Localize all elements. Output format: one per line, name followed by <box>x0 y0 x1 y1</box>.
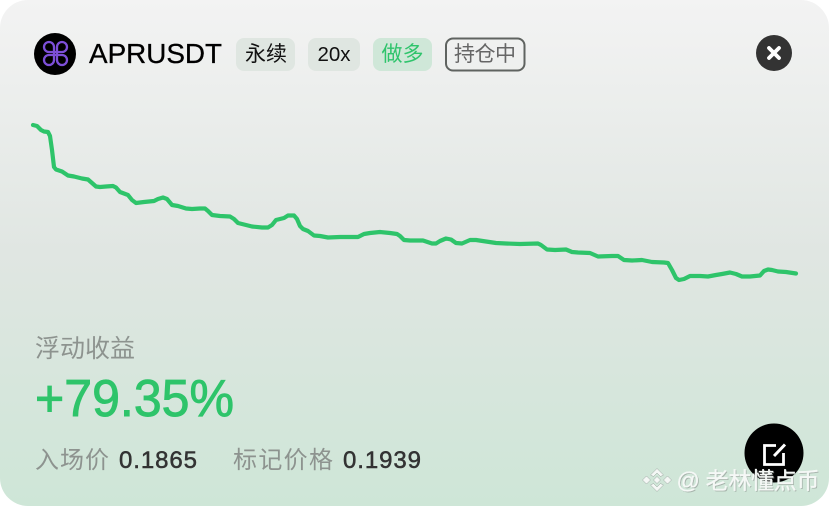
label: floating PnL: 浮动收益 <box>35 335 135 363</box>
badge: leverage: 20x <box>317 43 351 66</box>
icon: edit button <box>744 424 804 482</box>
PnL value: +79.35% <box>35 370 234 428</box>
badge: position open <box>446 38 524 70</box>
mark price <box>233 447 421 474</box>
watermark text: @ 老林懂点币 <box>678 468 820 494</box>
icon: diamond logo <box>642 468 672 492</box>
badge: position open: 持仓中 <box>454 43 516 66</box>
header <box>34 33 792 75</box>
badge: long: 做多 <box>382 43 424 66</box>
symbol name: APRUSDT <box>89 38 222 69</box>
badge: perpetual: 永续 <box>245 43 287 66</box>
icon: close button <box>756 35 792 71</box>
watermark: @ 老林懂点币 <box>676 468 820 494</box>
entry price: 入场价 <box>35 447 109 474</box>
entry price: 0.1865 <box>119 447 197 474</box>
badge: perpetual <box>236 38 295 71</box>
badge: leverage <box>308 38 360 71</box>
mark price: 0.1939 <box>343 447 421 474</box>
line chart <box>33 125 796 280</box>
entry price <box>35 447 197 474</box>
icon: token logo <box>34 33 76 75</box>
mark price: 标记价格 <box>233 447 333 474</box>
badge: long <box>373 38 432 71</box>
